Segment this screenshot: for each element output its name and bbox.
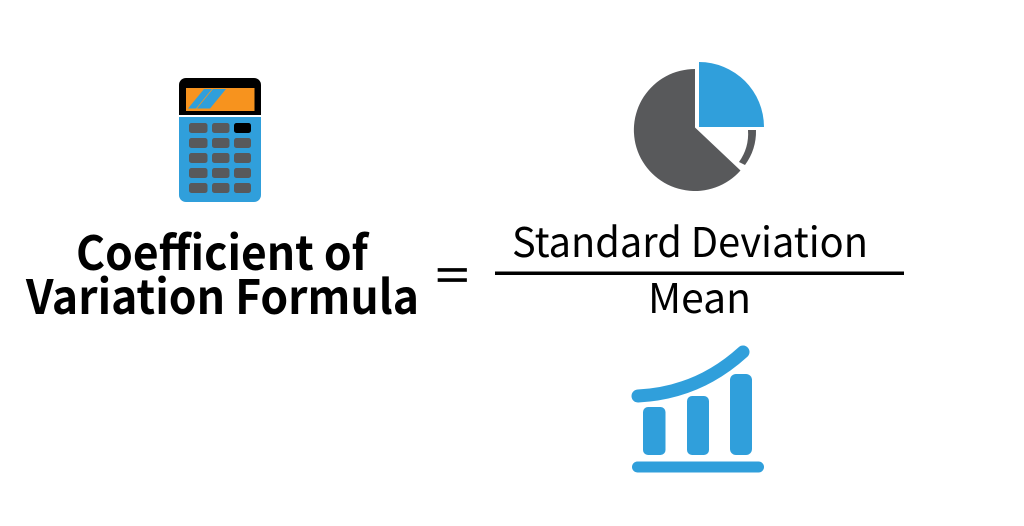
icon: calculator	[179, 78, 261, 202]
equals sign: =	[436, 242, 468, 304]
icon: rising bar chart	[632, 352, 764, 472]
heading: coefficient of variation formula: Coefficient of	[76, 215, 370, 284]
heading: coefficient of variation formula	[25, 215, 419, 328]
heading: coefficient of variation formula: Variation Formula	[25, 259, 419, 328]
formula fraction	[495, 209, 904, 325]
numerator: standard deviation: Standard Deviation	[512, 209, 868, 269]
icon: pie chart	[634, 62, 764, 191]
denominator: mean: Mean	[648, 265, 751, 325]
